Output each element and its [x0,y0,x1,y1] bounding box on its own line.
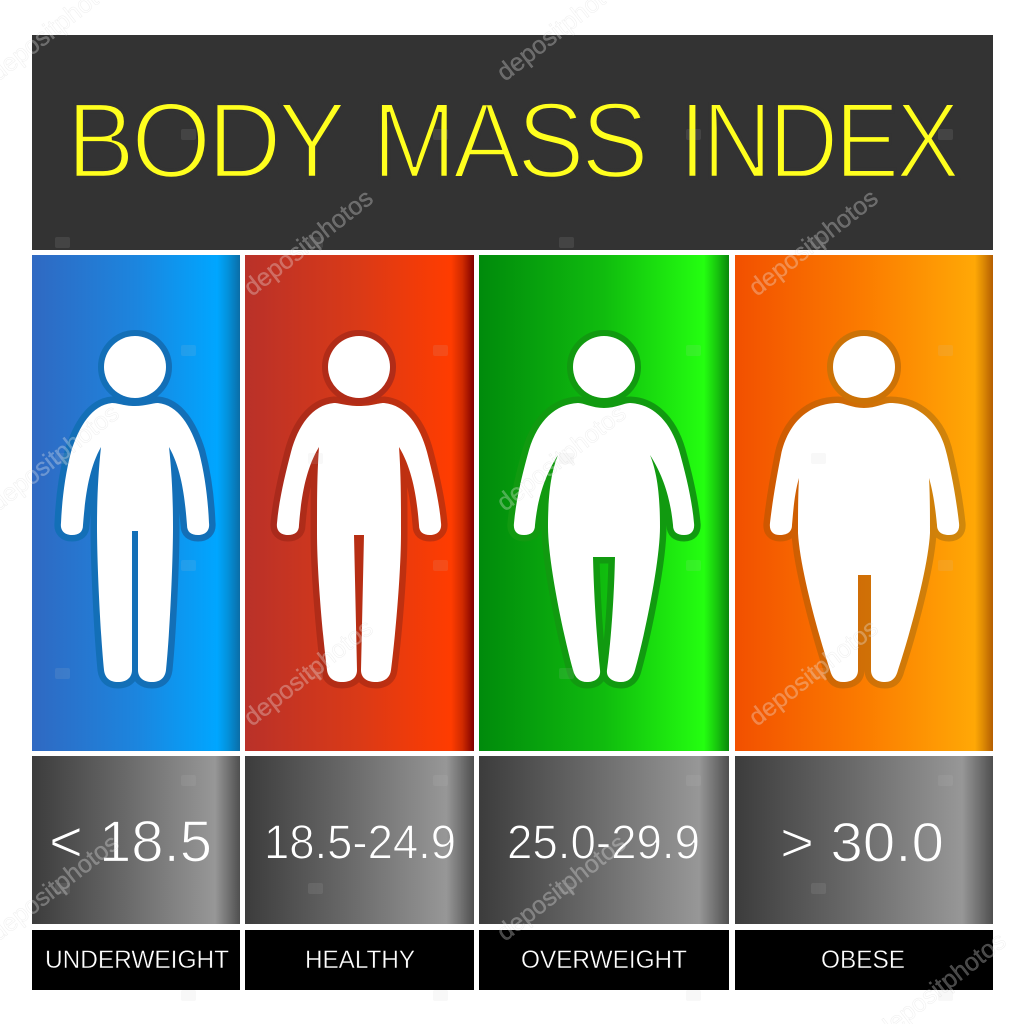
label text: healthy: HEALTHY [305,946,415,974]
title banner [32,35,993,250]
label text: obese: OBESE [821,946,905,974]
icon: healthy head [328,336,390,398]
icon: underweight head [104,336,166,398]
icon: overweight body [514,403,694,682]
label bar: overweight [479,930,729,990]
panel: underweight BMI value [32,756,240,924]
panel: healthy figure [245,255,474,751]
label text: underweight: UNDERWEIGHT [45,946,229,974]
value: over 30.0: > 30.0 [780,810,944,874]
watermark: stock photo marks: depositphotos [238,184,378,302]
icon: healthy body [277,403,441,682]
panel: overweight figure [479,255,729,751]
icon: obese head [833,336,895,398]
panel: overweight BMI value [479,756,729,924]
label bar: healthy [245,930,474,990]
panel: underweight figure [32,255,240,751]
watermark: small camera marks [55,129,953,1001]
panel: obese figure [735,255,993,751]
value: under 18.5: < 18.5 [49,810,212,874]
watermark: stock photo marks: depositphotos [491,399,631,517]
value: 25.0-29.9: 25.0-29.9 [507,816,700,870]
panel: obese BMI value [735,756,993,924]
title: body mass index: BODY [66,80,344,200]
icon: underweight body [61,403,209,682]
label bar: obese [735,930,993,990]
title: body mass index [66,80,958,200]
icon: obese body [770,403,959,682]
title: body mass index: INDEX [679,80,958,200]
icon: overweight head [573,336,635,398]
value: 18.5-24.9: 18.5-24.9 [264,816,456,870]
label text: overweight: OVERWEIGHT [521,946,687,974]
title: body mass index: MASS [372,80,645,200]
panel: healthy BMI value [245,756,474,924]
watermark: stock photo marks: depositphotos [743,184,883,302]
label bar: underweight [32,930,240,990]
watermark: stock photo marks: depositphotos [238,614,378,732]
watermark: stock photo marks: depositphotos [491,829,631,947]
watermark: stock photo marks: depositphotos [743,614,883,732]
